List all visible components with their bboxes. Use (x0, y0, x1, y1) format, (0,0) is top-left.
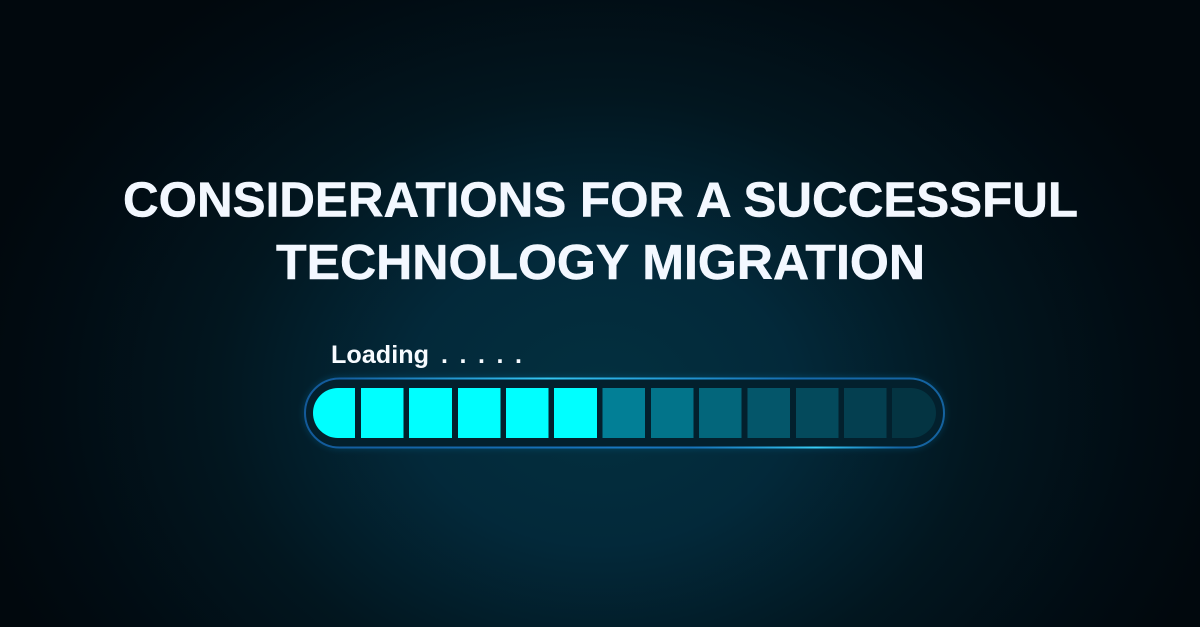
loading label: . . . . . (441, 341, 522, 369)
frame highlights (340, 378, 900, 448)
bar frame glow (305, 378, 944, 448)
title: TECHNOLOGY MIGRATION (276, 236, 925, 290)
unfilled segments (602, 388, 936, 438)
loading label (331, 341, 522, 369)
filled segments (313, 388, 597, 438)
loading label: Loading (331, 341, 429, 369)
progress bar (305, 378, 944, 448)
title: CONSIDERATIONS FOR A SUCCESSFUL (123, 174, 1078, 228)
title (123, 174, 1078, 290)
bar frame (305, 378, 944, 448)
